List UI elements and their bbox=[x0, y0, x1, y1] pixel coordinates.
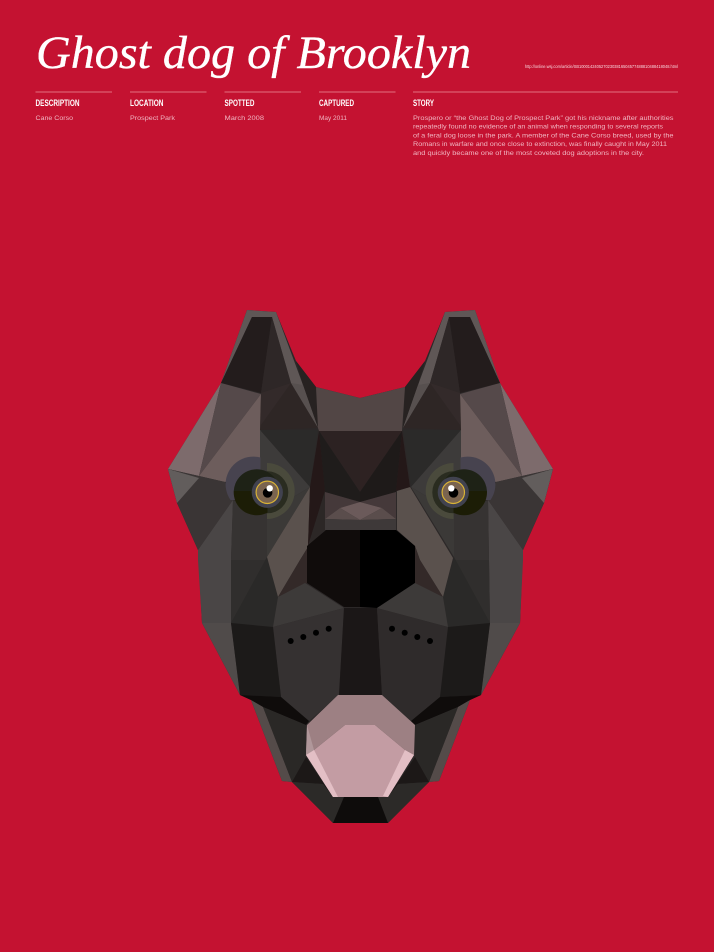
left muzzle bbox=[231, 583, 382, 721]
column: spotted bbox=[224, 92, 301, 122]
left face side bbox=[168, 383, 318, 695]
forehead and snout bridge bbox=[308, 387, 410, 546]
column: captured: May 2011 bbox=[319, 115, 347, 122]
dog head illustration bbox=[168, 310, 553, 823]
column: story: STORY bbox=[413, 98, 435, 108]
column: location: LOCATION bbox=[130, 98, 164, 108]
column: story: Romans in warfare and once close to extinction, was finally caught in May 2011 bbox=[413, 141, 667, 148]
column: location: Prospect Park bbox=[130, 115, 176, 122]
column: location bbox=[130, 92, 206, 122]
whisker dots bbox=[288, 626, 433, 644]
column: story bbox=[413, 92, 678, 157]
column: description: Cane Corso bbox=[36, 115, 73, 122]
right muzzle bbox=[377, 583, 490, 721]
left eye bbox=[226, 457, 295, 519]
column: spotted: SPOTTED bbox=[224, 98, 255, 108]
jaw bbox=[240, 695, 481, 823]
column: description: DESCRIPTION bbox=[36, 98, 80, 108]
source url: http://online.wsj.com/article/SB10001424052702303816504577488810488418048.html bbox=[525, 64, 678, 69]
title: Ghost dog of Brooklyn bbox=[36, 27, 471, 79]
column: captured: CAPTURED bbox=[319, 98, 354, 108]
column: story: repeatedly found no evidence of an animal when responding to several reports bbox=[413, 124, 664, 131]
column: story: and quickly became one of the most coveted dog adoptions in the city. bbox=[413, 150, 644, 157]
right ear bbox=[403, 310, 500, 428]
column: spotted: March 2008 bbox=[224, 115, 264, 122]
right face side bbox=[397, 383, 553, 695]
tongue bbox=[306, 695, 415, 797]
column: story: Prospero or “the Ghost Dog of Prospect Park” got his nickname after authorities bbox=[413, 115, 674, 122]
left ear bbox=[221, 310, 318, 428]
column: captured bbox=[319, 92, 396, 122]
right eye bbox=[426, 457, 495, 519]
nose bbox=[307, 530, 415, 608]
column: description bbox=[36, 92, 112, 122]
column: story: of a feral dog loose in the park. A member of the Cane Corso breed, used by the bbox=[413, 132, 674, 139]
